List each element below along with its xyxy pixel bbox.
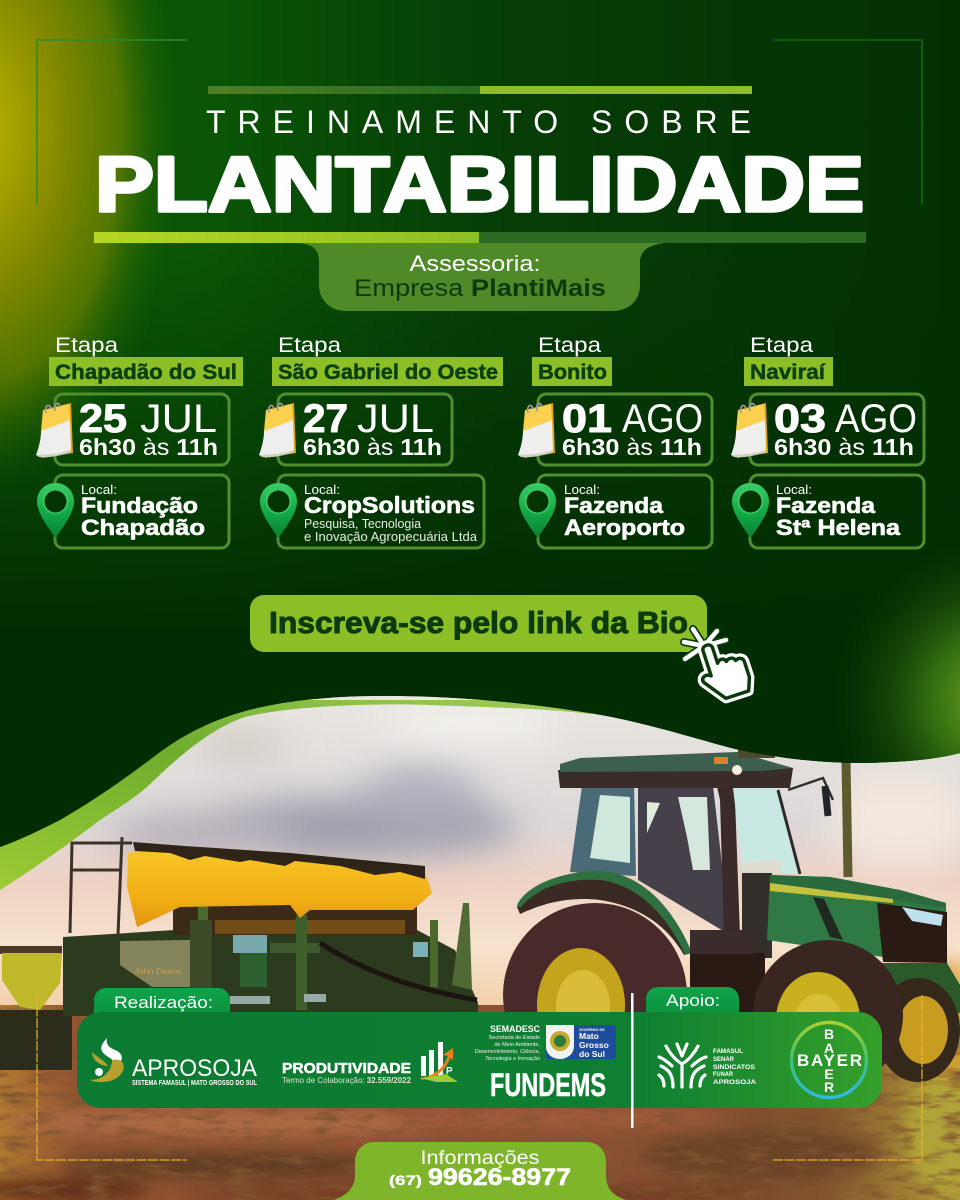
- contact tab: (67): [389, 1172, 422, 1188]
- date box: [538, 394, 712, 465]
- logo: Produtividade: [282, 1042, 458, 1085]
- logo: Aprosoja: APROSOJA: [132, 1055, 257, 1082]
- background gradient with dark wave edge: [0, 0, 960, 900]
- logo: Aprosoja: SISTEMA FAMASUL | MATO GROSSO DO SUL: [132, 1080, 258, 1087]
- top title bar: [208, 86, 752, 94]
- city tag: Bonito: [538, 361, 607, 384]
- etapa label: Etapa: [278, 334, 341, 357]
- location box: Pesquisa, Tecnologia: [304, 517, 421, 531]
- logo: Famasul: SENAR: [713, 1056, 734, 1063]
- logo: Famasul: APROSOJA: [713, 1079, 756, 1086]
- location box: Stª Helena: [776, 515, 901, 540]
- wave: lime green band over the photo: [0, 700, 640, 890]
- etapa label: Etapa: [750, 334, 813, 357]
- logo: SEMADESC: Secretaria de Estado: [489, 1035, 540, 1041]
- logo: Bayer: BAYER: [797, 1051, 862, 1070]
- logo: Produtividade: PRODUTIVIDADE: [282, 1060, 411, 1077]
- title: treinamento sobre: TREINAMENTO SOBRE: [206, 104, 751, 140]
- signup button: Inscreva-se pelo link da Bio: [269, 605, 688, 640]
- logo: FUNDEMS: FUNDEMS: [490, 1067, 606, 1103]
- location box: Local:: [776, 482, 812, 497]
- icon: calendar: [518, 403, 555, 458]
- date box: 6h30 às 11h: [562, 434, 702, 460]
- tab: apoio: [646, 987, 739, 1043]
- logo: Produtividade: Termo de Colaboração: 32.559/2022: [282, 1075, 411, 1085]
- icon: planter frame: John Deere: [134, 967, 182, 976]
- location box: [55, 475, 229, 548]
- location box: Local:: [304, 482, 340, 497]
- logo: SEMADESC: Desenvolvimento, Ciência,: [475, 1049, 540, 1055]
- logo: governo de Mato Grosso do Sul: Mato: [579, 1031, 599, 1041]
- location box: [538, 475, 712, 548]
- logo: Bayer: E: [824, 1066, 834, 1082]
- city tag: [532, 357, 612, 386]
- tab: realização: Realização:: [114, 993, 213, 1012]
- divider line: [631, 993, 634, 1128]
- panel: partners: [77, 1012, 882, 1108]
- photo: tractor and planter in the field: [0, 690, 960, 1200]
- logo: Famasul: FUNAR: [713, 1071, 733, 1078]
- logo: governo de Mato Grosso do Sul: do Sul: [579, 1049, 605, 1059]
- icon: calendar: [36, 403, 73, 458]
- logo: SEMADESC: [475, 1024, 540, 1062]
- title: plantabilidade: PLANTABILIDADE: [95, 140, 864, 228]
- panel: etapa São Gabriel do Oeste: [259, 334, 503, 548]
- logo: Aprosoja: [90, 1038, 258, 1087]
- icon: yellow seed hoppers: [127, 842, 432, 927]
- tab: realização: [94, 988, 230, 1044]
- logo: Bayer: R: [824, 1079, 834, 1095]
- etapa label: Etapa: [538, 334, 601, 357]
- panel: etapa Naviraí: [731, 334, 924, 548]
- assessoria badge: [300, 243, 664, 311]
- date box: [750, 394, 924, 465]
- location box: Fazenda: [564, 493, 664, 518]
- logo: Famasul: [659, 1044, 756, 1087]
- icon: calendar: [731, 403, 768, 458]
- city tag: Naviraí: [750, 361, 826, 384]
- contact tab: Informações: [420, 1148, 540, 1169]
- logo: SEMADESC: Tecnologia e Inovação: [485, 1056, 540, 1062]
- contact tab: [334, 1142, 626, 1200]
- icon: planter ladder: [70, 837, 132, 935]
- tab: apoio: Apoio:: [666, 991, 720, 1010]
- location box: [278, 475, 484, 548]
- icon: map pin: [732, 483, 769, 538]
- icon: rear wheel with yellow rim: [503, 871, 753, 1012]
- location box: Local:: [564, 482, 600, 497]
- icon: planter frame: [63, 903, 478, 1016]
- bottom title bar: [94, 232, 866, 243]
- icon: tractor exhaust and mirror: [788, 760, 848, 877]
- icon: front wheels: [753, 940, 960, 1090]
- date box: 6h30 às 11h: [303, 434, 442, 460]
- location box: [750, 475, 924, 548]
- signup button: [250, 595, 707, 652]
- icon: map pin: [260, 483, 297, 538]
- panel: etapa Chapadão do Sul: [36, 334, 243, 548]
- location box: Chapadão: [81, 515, 205, 540]
- date box: 03: [774, 397, 826, 441]
- logo: governo de Mato Grosso do Sul: GOVERNO DE: [579, 1028, 605, 1032]
- date box: 6h30 às 11h: [774, 434, 914, 460]
- assessoria badge: Empresa PlantiMais: [354, 275, 606, 302]
- etapa label: Etapa: [55, 334, 118, 357]
- logo: Bayer: [792, 1022, 866, 1098]
- logo: Produtividade: P: [446, 1066, 453, 1077]
- icon: left auxiliary hopper: [0, 946, 72, 1070]
- city tag: [744, 357, 833, 386]
- date box: JUL: [140, 397, 217, 441]
- date box: 6h30 às 11h: [79, 434, 218, 460]
- date box: [278, 394, 452, 465]
- contact tab: 99626-8977: [428, 1164, 571, 1191]
- city tag: São Gabriel do Oeste: [278, 361, 498, 384]
- logo: Bayer: B: [824, 1026, 834, 1042]
- date box: 01: [562, 397, 612, 441]
- date box: 27: [303, 397, 348, 441]
- date box: [55, 394, 229, 465]
- panel: etapa Bonito: [518, 334, 712, 548]
- logo: Famasul: FAMASUL: [713, 1048, 743, 1055]
- location box: e Inovação Agropecuária Ltda: [304, 530, 477, 544]
- logo: Famasul: SINDICATOS: [713, 1064, 755, 1071]
- decorative frame: bottom corners: [37, 995, 922, 1160]
- icon: map pin: [37, 483, 74, 538]
- logo: Bayer: A: [824, 1040, 834, 1056]
- location box: CropSolutions: [304, 492, 475, 518]
- icon: calendar: [259, 403, 296, 458]
- logo: SEMADESC: de Meio Ambiente,: [494, 1042, 540, 1048]
- decorative frame: top corners: [37, 40, 922, 205]
- date box: JUL: [357, 397, 434, 441]
- icon: clicking hand: [684, 629, 753, 703]
- date box: AGO: [622, 397, 703, 441]
- logo: SEMADESC: SEMADESC: [490, 1024, 540, 1034]
- location box: Local:: [81, 482, 117, 497]
- location box: Aeroporto: [564, 515, 685, 540]
- location box: Fundação: [81, 493, 198, 518]
- location box: Fazenda: [776, 493, 876, 518]
- assessoria badge: Assessoria:: [410, 251, 540, 276]
- date box: 25: [79, 397, 127, 441]
- logo: governo de Mato Grosso do Sul: [546, 1025, 616, 1059]
- date box: AGO: [835, 397, 917, 441]
- logo: governo de Mato Grosso do Sul: Grosso: [579, 1040, 609, 1050]
- city tag: Chapadão do Sul: [55, 361, 237, 384]
- icon: tractor cab: [558, 747, 800, 935]
- icon: map pin: [519, 483, 556, 538]
- icon: tractor hood: [690, 873, 947, 1015]
